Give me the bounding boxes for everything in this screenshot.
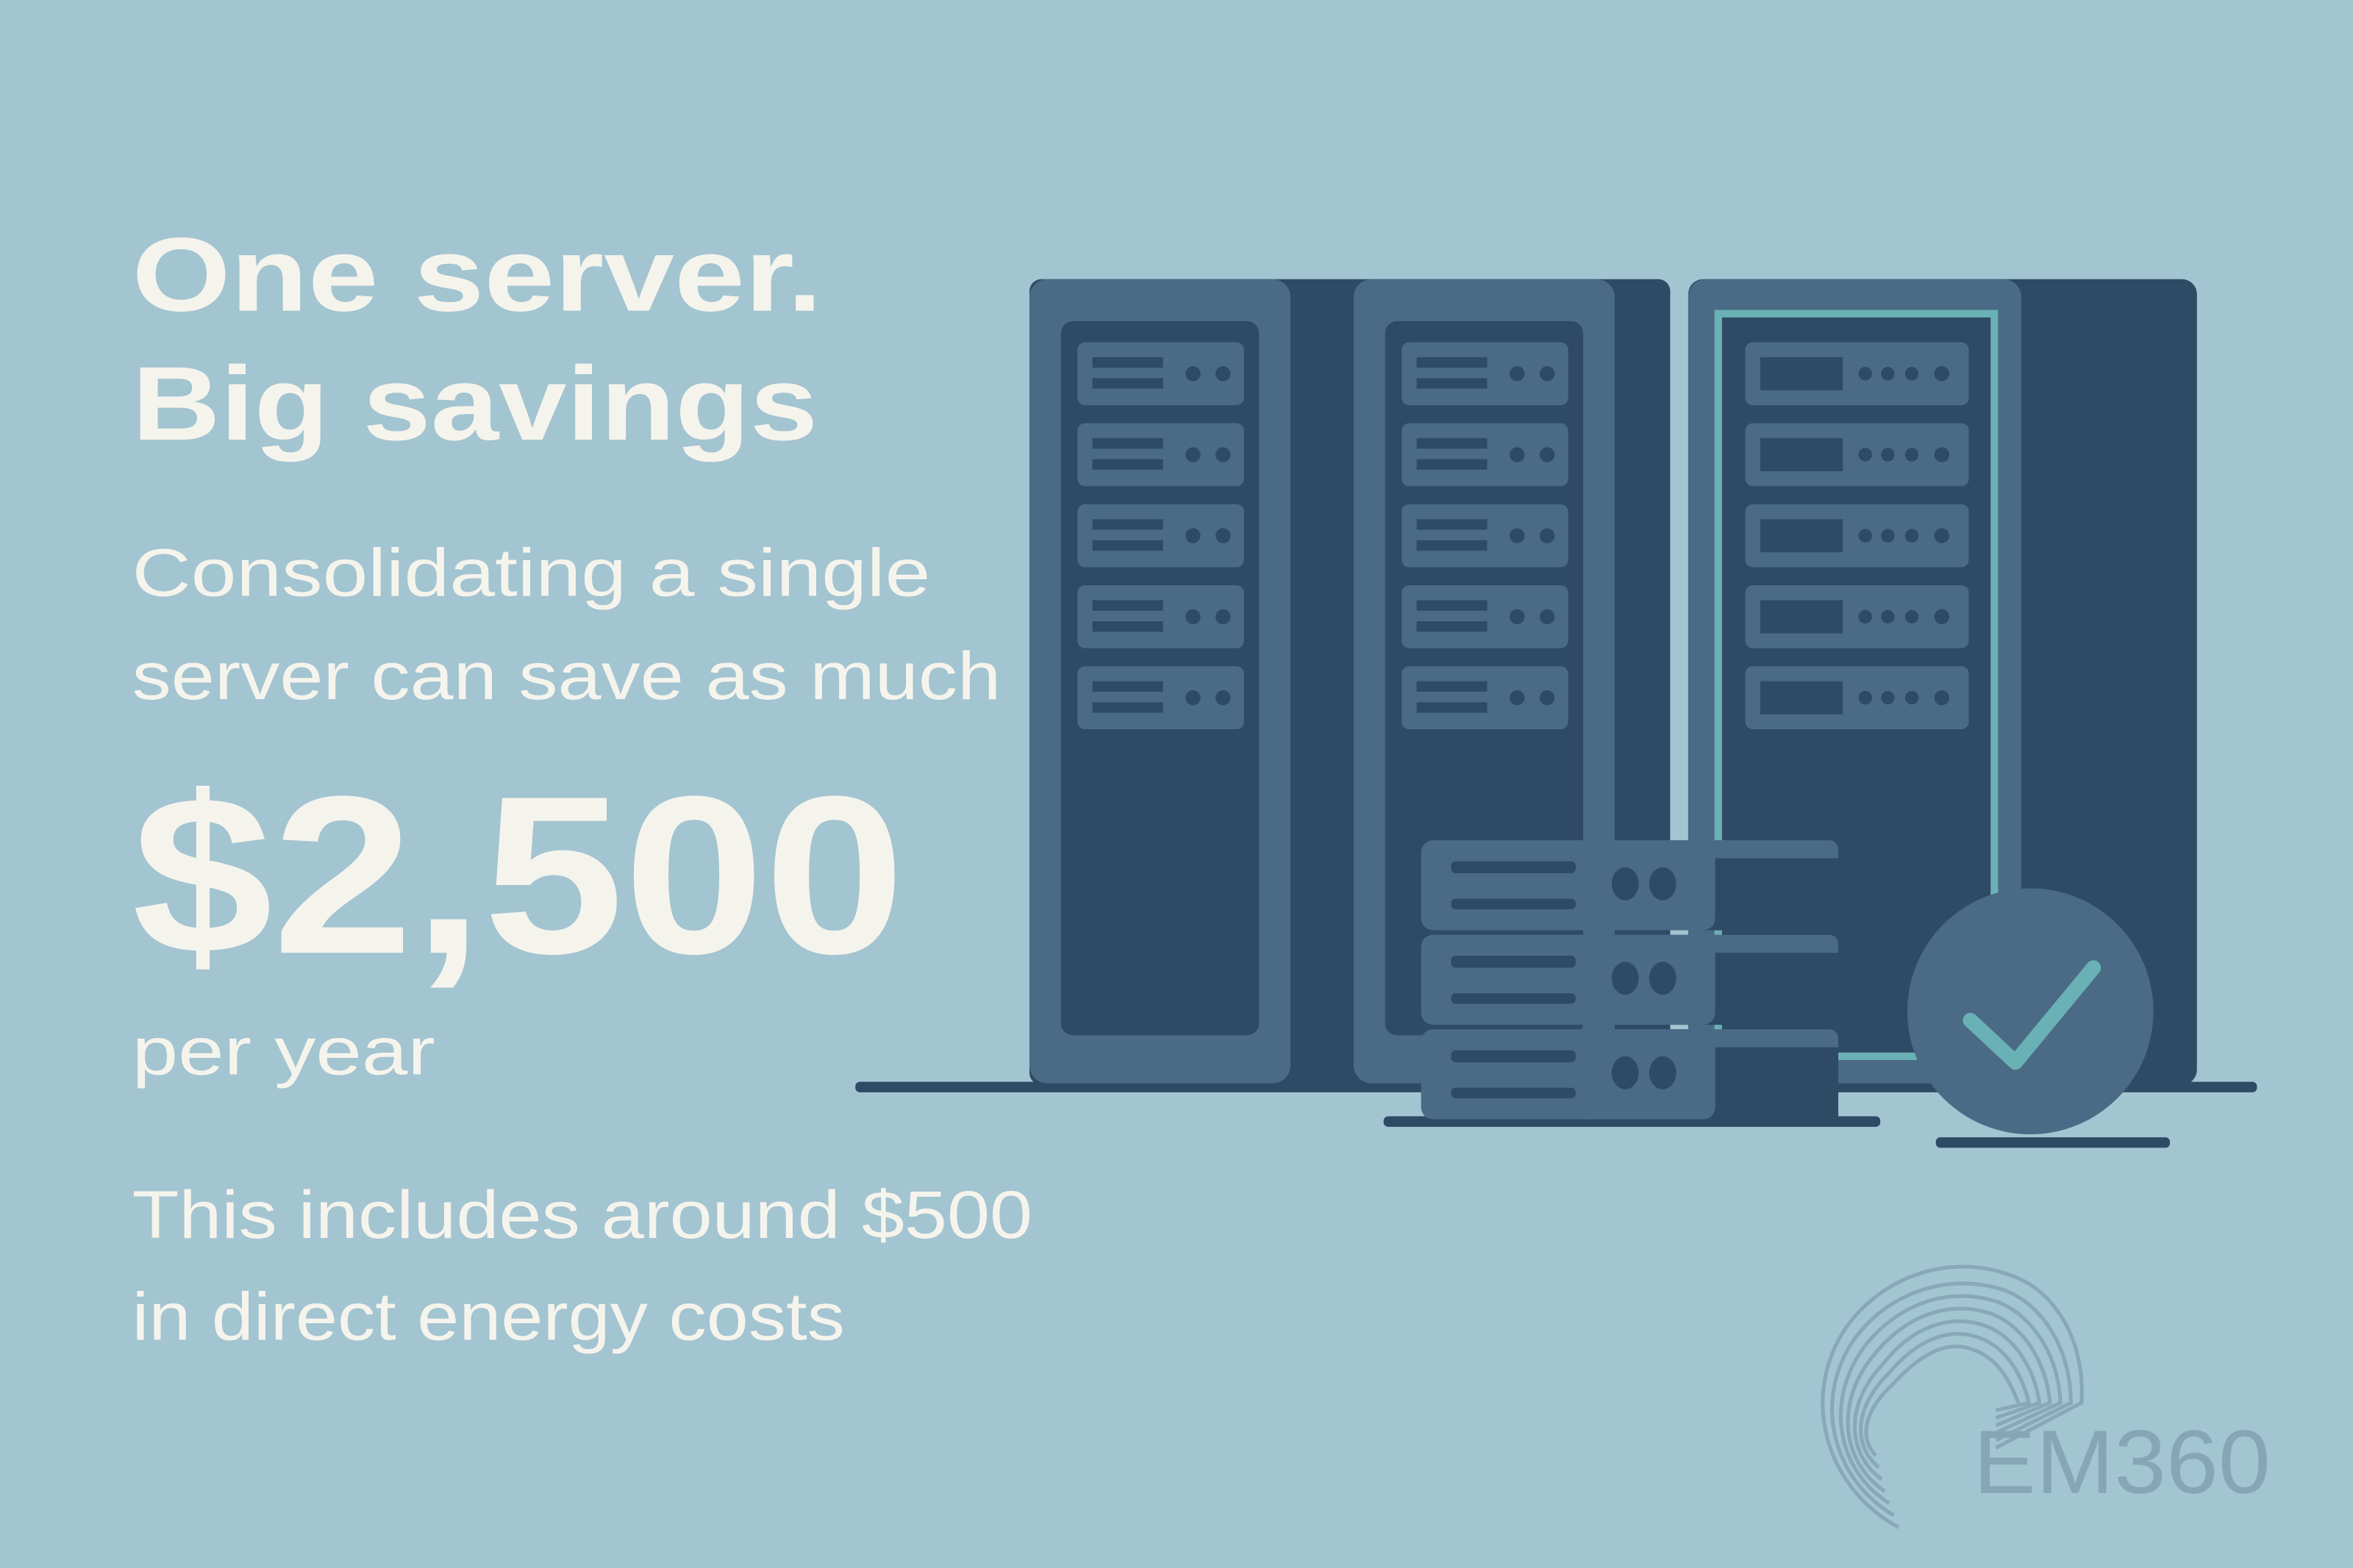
text block: energy costs xyxy=(132,1178,1032,1355)
logo: EM360: EM360 xyxy=(1974,1411,2271,1512)
text: per year: per year xyxy=(132,1014,435,1089)
icon: check circle xyxy=(1907,888,2170,1148)
rack 3 with teal highlight xyxy=(1688,279,2197,1085)
floor line xyxy=(855,1082,2257,1092)
rack 1 and 2 back body xyxy=(1029,279,1670,1085)
title: One server. xyxy=(132,217,822,334)
text block: consolidation intro: server can save as much xyxy=(132,639,1001,714)
illustration: server racks xyxy=(855,279,2257,1092)
logo: EM360 xyxy=(1823,1267,2271,1528)
text block: consolidation intro xyxy=(132,535,1001,714)
rack 1 xyxy=(1029,279,1290,1084)
text block: energy costs: This includes around $500 xyxy=(132,1178,1032,1253)
text block: energy costs: in direct energy costs xyxy=(132,1280,845,1355)
title xyxy=(132,217,822,462)
big number: $2,500: $2,500 xyxy=(132,749,905,1000)
rack 2 xyxy=(1354,279,1615,1084)
title: Big savings xyxy=(132,346,818,462)
text block: consolidation intro: Consolidating a single xyxy=(132,535,930,610)
illustration: stacked servers xyxy=(1384,840,1880,1127)
